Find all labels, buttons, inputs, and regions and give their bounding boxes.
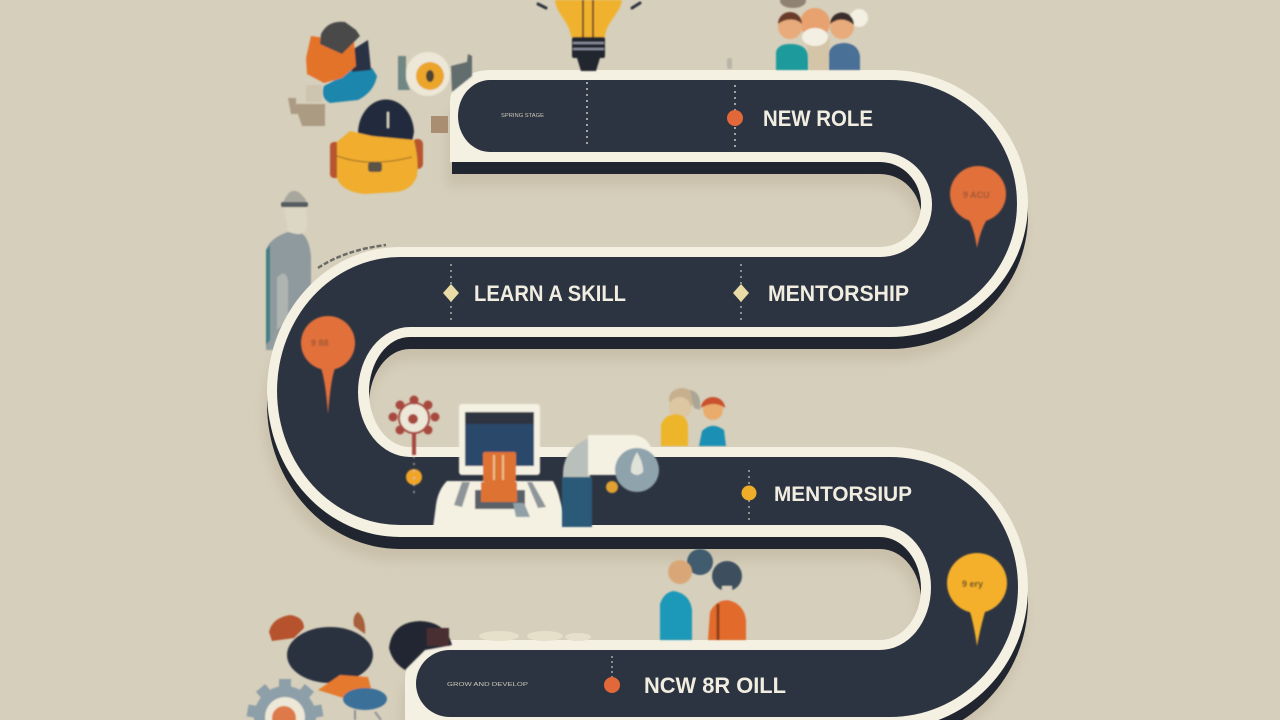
label: mentorship upper: MENTORSHIP — [768, 281, 909, 306]
icon: computer workstation — [433, 404, 568, 528]
label: new skill bottom — [447, 656, 786, 698]
label: mentorsiup lower: MENTORSIUP — [774, 483, 912, 506]
icon: coin and plant tools — [398, 52, 472, 96]
pin: orange left — [301, 316, 355, 414]
icon: gear — [247, 679, 323, 720]
label: new role: NEW ROLE — [763, 106, 873, 131]
icon: tan tool — [288, 98, 325, 126]
icon: grey standing figure — [266, 191, 311, 350]
label: mentorship upper — [733, 264, 909, 320]
icon: two people talking — [660, 549, 746, 640]
label: new skill bottom: GROW AND DEVELOP — [447, 682, 529, 688]
pin: yellow right — [947, 553, 1007, 646]
pin: orange left: 9 88 — [311, 338, 329, 348]
pin: yellow right: 9 ery — [962, 579, 983, 589]
pin: orange right — [950, 166, 1006, 248]
small caption: top lane: SPRING STAGE — [501, 113, 545, 119]
icon: team of three — [727, 0, 868, 70]
small caption: top lane — [501, 82, 587, 148]
label: new skill bottom: NCW 8R OILL — [644, 673, 786, 698]
icon: red gear flower — [388, 396, 440, 497]
icon: brown tab — [431, 116, 448, 133]
label: mentorsiup lower — [742, 470, 912, 520]
icon: clouds on road — [479, 631, 591, 641]
icon: yellow briefcase — [330, 99, 423, 194]
icon: grey device with badge — [562, 435, 659, 527]
icon: dark bird figure — [269, 612, 452, 720]
icon: two colleagues — [661, 388, 726, 446]
label: learn a skill — [443, 264, 626, 320]
icon: orange backpack figure — [306, 22, 377, 103]
label: new role — [727, 85, 873, 150]
icon: light bulb — [538, 0, 640, 71]
pin: orange right: 9 ACU — [963, 190, 990, 200]
winding road — [264, 70, 1028, 720]
label: learn a skill: LEARN A SKILL — [474, 281, 626, 306]
